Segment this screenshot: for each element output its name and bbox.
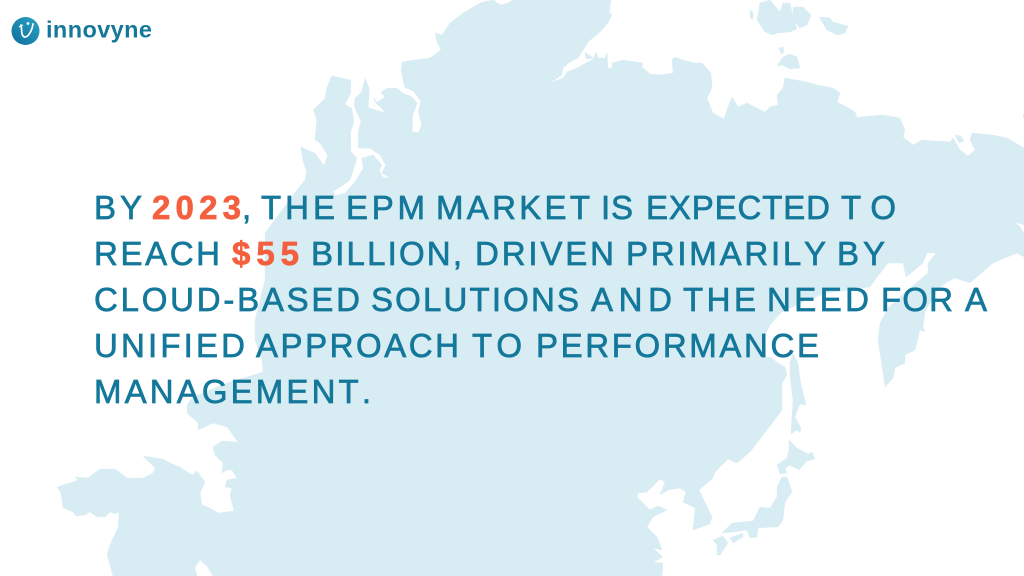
headline statement: MANAGEMENT. — [94, 373, 371, 410]
headline statement: REACH — [94, 235, 220, 272]
headline statement: SOLUTIONS — [371, 281, 579, 318]
headline statement: TO — [472, 327, 522, 364]
headline statement: BY — [837, 235, 885, 272]
headline statement: 2023 — [152, 189, 241, 226]
headline statement: BILLION, — [311, 235, 462, 272]
headline statement: MARKET — [436, 189, 590, 226]
headline statement: NEED — [767, 281, 869, 318]
headline statement: CLOUD-BASED — [94, 281, 360, 318]
logo wordmark: innovyne — [46, 16, 152, 42]
headline statement: DRIVEN — [475, 235, 614, 272]
headline statement: FOR — [881, 281, 953, 318]
logo icon — [12, 17, 40, 45]
headline statement: , — [242, 189, 251, 226]
headline statement: APPROACH — [256, 327, 459, 364]
headline statement: EPM — [346, 189, 425, 226]
headline statement: IS — [601, 189, 633, 226]
headline statement: UNIFIED — [94, 327, 245, 364]
headline statement: $55 — [232, 235, 299, 272]
headline statement: TO — [841, 189, 896, 226]
headline statement: THE — [261, 189, 335, 226]
headline statement: PERFORMANCE — [536, 327, 819, 364]
headline statement: BY — [94, 189, 142, 226]
headline statement: AND — [591, 281, 672, 318]
logo — [12, 16, 152, 45]
headline statement: EXPECTED — [646, 189, 830, 226]
headline statement: PRIMARILY — [626, 235, 826, 272]
headline statement: THE — [683, 281, 756, 318]
headline statement: A — [965, 281, 987, 318]
